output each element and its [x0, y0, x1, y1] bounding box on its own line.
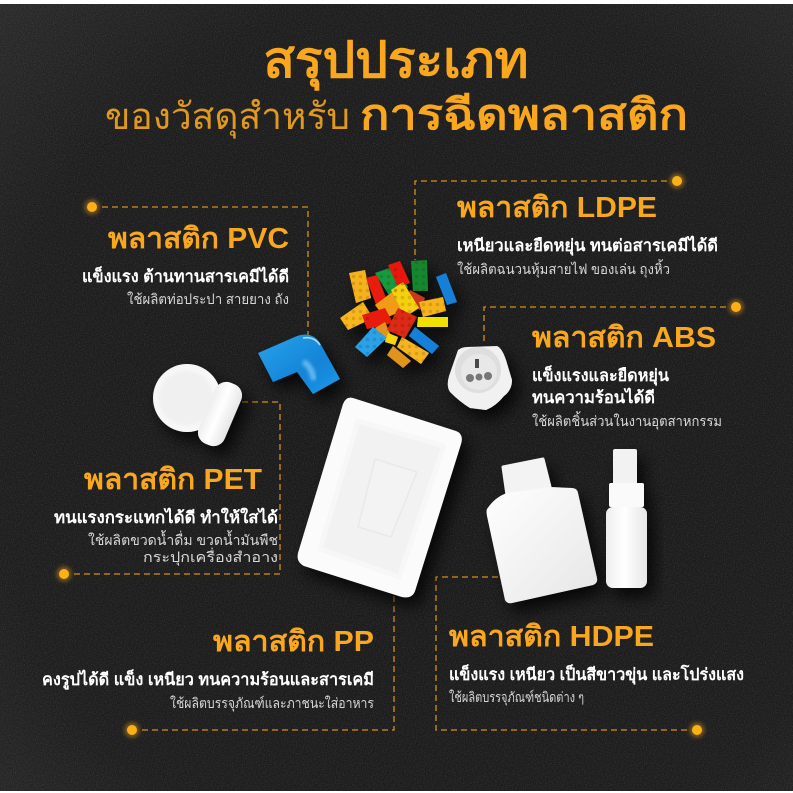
- text block: PET: [54, 464, 278, 566]
- text block: ABS: ทนความร้อนได้ดี: [532, 387, 655, 407]
- text block: PP: คงรูปได้ดี แข็ง เหนียว ทนความร้อนและสารเคมี: [42, 668, 374, 691]
- text block: HDPE: [449, 621, 744, 706]
- connector: PET: [56, 402, 280, 582]
- connector: LDPE: [415, 174, 684, 260]
- text block: ABS: แข็งแรงและยืดหยุ่น: [532, 364, 670, 386]
- text block: LDPE: ใช้ผลิตฉนวนหุ้มสายไฟ ของเล่น ถุงหิ้ว: [457, 259, 670, 278]
- icon: white socket plug: [448, 346, 512, 410]
- icon: white spray bottle: [606, 449, 647, 588]
- text block: PET: ใช้ผลิตขวดน้ำดื่ม ขวดน้ำมันพืช: [88, 530, 278, 548]
- text block: PET: ทนแรงกระแทกได้ดี ทำให้ใสได้: [54, 507, 278, 527]
- text block: PP: ใช้ผลิตบรรจุภัณฑ์และภาชนะใส่อาหาร: [170, 695, 374, 712]
- title line 2 bold: การฉีดพลาสติก: [360, 91, 688, 138]
- icon: white rectangular food tray: [298, 398, 462, 597]
- text block: HDPE: แข็งแรง เหนียว เป็นสีขาวขุ่น และโปร่งแสง: [449, 663, 744, 685]
- connector: HDPE: [436, 577, 704, 738]
- text block: PVC: [82, 223, 289, 307]
- title line 2 light: ของวัสดุสำหรับ: [105, 96, 350, 139]
- connector: PP: [124, 596, 394, 738]
- connector: PVC: [84, 200, 308, 338]
- text block: ABS: [532, 322, 722, 430]
- text block: PP: [42, 626, 374, 712]
- text block: HDPE: พลาสติก HDPE: [449, 621, 654, 653]
- text block: LDPE: เหนียวและยืดหยุ่น ทนต่อสารเคมีได้ดี: [457, 235, 718, 256]
- title: [105, 32, 688, 139]
- text block: LDPE: [457, 192, 718, 278]
- connector: ABS: [484, 300, 744, 345]
- title line 1: สรุปประเภท: [264, 32, 528, 91]
- icon: white HDPE bottle: [486, 459, 597, 603]
- text block: LDPE: พลาสติก LDPE: [457, 192, 657, 224]
- icon: open white jar: [153, 364, 246, 450]
- text block: HDPE: ใช้ผลิตบรรจุภัณฑ์ชนิดต่าง ๆ: [449, 689, 584, 706]
- text block: PVC: พลาสติก PVC: [108, 223, 289, 255]
- text block: PVC: แข็งแรง ต้านทานสารเคมีได้ดี: [82, 265, 289, 286]
- text block: ABS: ใช้ผลิตชิ้นส่วนในงานอุตสาหกรรม: [532, 411, 722, 430]
- text block: PET: กระปุกเครื่องสำอาง: [143, 548, 278, 566]
- icon: blue pipe elbow: [258, 335, 340, 394]
- text block: PP: พลาสติก PP: [213, 626, 374, 658]
- icon: lego bricks: [340, 260, 457, 368]
- text block: PET: พลาสติก PET: [84, 464, 262, 496]
- text block: PVC: ใช้ผลิตท่อประปา สายยาง ถัง: [127, 291, 289, 307]
- text block: ABS: พลาสติก ABS: [532, 322, 716, 354]
